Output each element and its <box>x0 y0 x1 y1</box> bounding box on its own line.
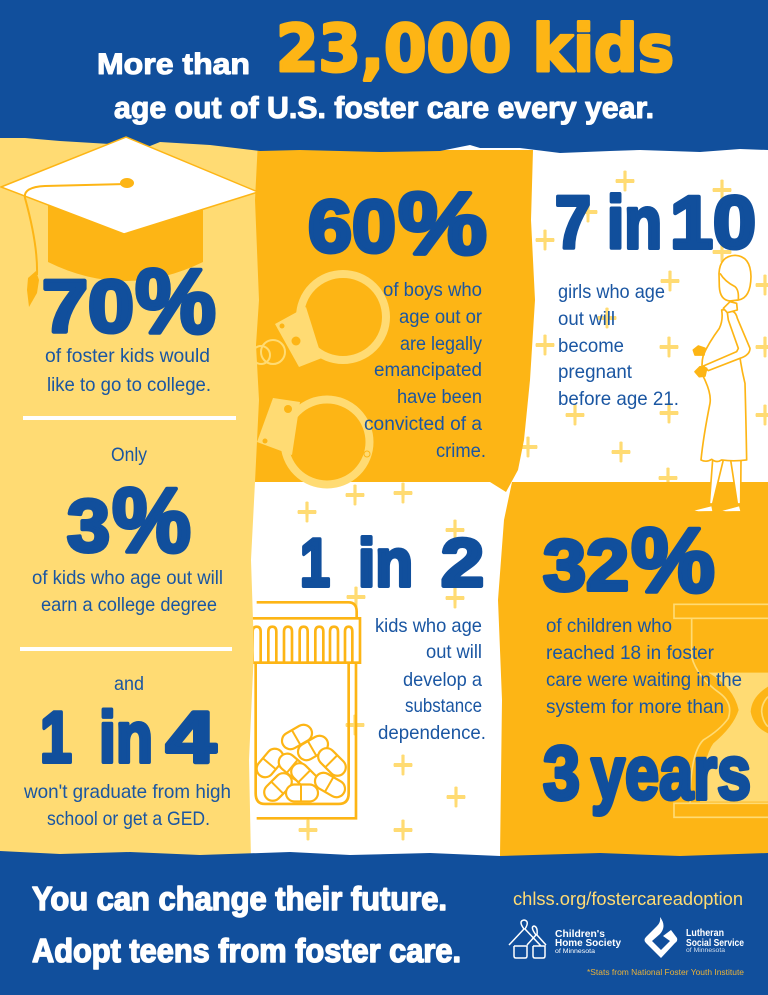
text: degree: of kids who age out will <box>32 567 223 589</box>
stat: 70% <box>42 251 216 353</box>
logo: Children's Home Society: of Minnesota <box>555 949 596 955</box>
stat: 3%: 3 <box>67 484 110 567</box>
stat: 1 in 2: in <box>358 525 413 601</box>
text: substance description: dependence. <box>378 722 486 744</box>
logo: Lutheran Social Service: Lutheran <box>686 928 724 939</box>
logo: Lutheran Social Service: Social Service <box>686 938 744 949</box>
text: pregnancy description: become <box>558 335 624 357</box>
text: convictions description: are legally <box>400 333 482 355</box>
stat: 32% <box>543 510 715 612</box>
text: pregnancy description: pregnant <box>558 361 633 383</box>
text: substance description: out will <box>426 641 482 663</box>
stat: 7 in 10 <box>555 181 756 264</box>
text: and: and <box>114 673 144 695</box>
stat: 32%: % <box>631 510 715 612</box>
logo: Lutheran Social Service: of Minnesota <box>686 948 726 954</box>
call to action: You can change their future. <box>32 880 447 917</box>
stat: 1 in 4 <box>40 698 216 778</box>
stat: 1 in 2 <box>300 525 484 601</box>
text: substance description: substance <box>405 695 482 717</box>
logo: Lutheran Social Service <box>644 917 744 958</box>
logo: Children's Home Society: Home Society <box>555 938 621 949</box>
stat: 1 in 4: 1 <box>40 698 72 778</box>
source note: *Stats from National Foster Youth Institute <box>587 967 744 977</box>
text: waiting description: care were waiting in the <box>546 669 742 691</box>
title: more than: More than <box>97 48 250 81</box>
stat: 60%: 60 <box>308 185 396 268</box>
text: graduation: won't graduate from high <box>23 781 231 803</box>
stat: 3% <box>67 470 191 572</box>
panel: convictions <box>252 150 535 492</box>
text: only: Only <box>111 444 147 466</box>
text: convictions description: crime. <box>436 440 486 462</box>
stat: 3 years: 3 <box>543 731 580 816</box>
stat: 1 in 4: 4 <box>166 698 216 778</box>
logo: Children's Home Society <box>509 920 621 958</box>
panel: college statistics <box>1 137 258 830</box>
text: waiting description: of children who <box>546 615 672 637</box>
stat: 7 in 10: 7 <box>555 181 591 264</box>
icon: handcuffs <box>252 274 386 484</box>
text: convictions description: have been <box>397 386 482 408</box>
stat: 60% <box>308 174 487 273</box>
header banner <box>0 0 768 153</box>
title: second line: age out of U.S. foster care every year. <box>114 90 654 125</box>
icon: pill bottle <box>250 602 360 818</box>
panel: pregnancy statistic <box>518 140 768 490</box>
logo: Children's Home Society: Children's <box>555 929 605 940</box>
stat: 3%: % <box>112 470 191 572</box>
stat: 1 in 4: in <box>99 698 153 778</box>
stat: 7 in 10: in <box>607 181 662 264</box>
stat: 1 in 2: 1 <box>300 525 330 601</box>
text: waiting description: reached 18 in foster <box>546 642 714 664</box>
stat: 32%: 32 <box>543 526 629 606</box>
panel: college background <box>0 130 259 860</box>
title: 23,000 kids: 23,000 kids <box>276 12 674 87</box>
stat: 70%: % <box>135 251 216 353</box>
text: convictions description: age out or <box>399 306 482 328</box>
decorative crosses <box>298 482 466 840</box>
text: college wish: of foster kids would <box>45 345 210 367</box>
panel: waiting time <box>498 482 768 856</box>
text: substance description: kids who age <box>375 615 482 637</box>
call to action: Adopt teens from foster care. <box>32 932 461 969</box>
text: degree: earn a college degree <box>41 594 217 616</box>
text: pregnancy description: before age 21. <box>558 388 679 410</box>
website: chlss.org/fostercareadoption <box>513 888 743 909</box>
panel: substance dependence <box>245 482 507 854</box>
pills <box>253 722 349 804</box>
text: pregnancy description: out will <box>558 308 615 330</box>
text: convictions description: emancipated <box>374 359 482 381</box>
footer banner <box>0 851 768 995</box>
stat: 60%: % <box>398 174 487 273</box>
stat: 7 in 10: 10 <box>670 181 756 264</box>
text: waiting description: system for more than <box>546 696 724 718</box>
text: pregnancy description: girls who age <box>558 281 665 303</box>
text: graduation: school or get a GED. <box>47 808 210 830</box>
icon: pregnant woman <box>693 255 751 512</box>
decorative crosses <box>518 170 768 488</box>
stat: 70%: 70 <box>42 265 134 348</box>
text: college wish: like to go to college. <box>47 374 211 396</box>
text: convictions description: of boys who <box>383 279 482 301</box>
icon: hourglass <box>674 604 768 817</box>
text: substance description: develop a <box>403 669 482 691</box>
text: convictions description: convicted of a <box>364 413 482 435</box>
stat: 1 in 2: 2 <box>441 525 484 601</box>
icon: graduation cap <box>1 137 258 307</box>
